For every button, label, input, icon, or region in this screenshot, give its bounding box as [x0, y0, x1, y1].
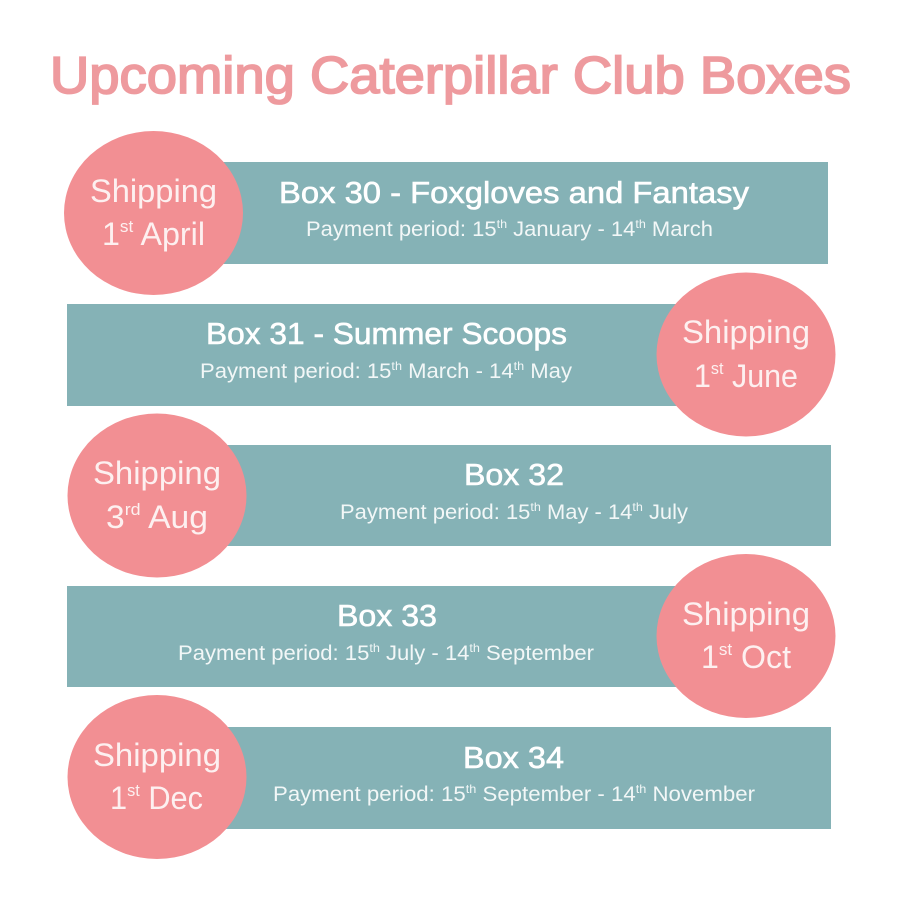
payment period: box 31: March - 14 [402, 360, 514, 383]
payment period: box 34: th [636, 782, 646, 796]
panel: box 30 [64, 131, 828, 295]
badge: shipping 1st Oct [656, 554, 836, 718]
heading: box 31: Box 31 - Summer Scoops [206, 316, 567, 351]
payment period: box 30: Payment period: 15 [306, 218, 488, 241]
payment period: box 33: th [469, 641, 480, 655]
payment period: box 33: th [369, 641, 380, 655]
banner: box 32 [205, 445, 831, 546]
shipping label: box 30: Shipping [90, 173, 217, 209]
panel: box 32 [68, 414, 831, 578]
shipping label: box 34: Shipping [93, 737, 221, 773]
shipping label: box 32: Shipping [93, 455, 221, 491]
payment period: box 30: January - 14 [507, 218, 636, 241]
badge: shipping 3rd Aug [68, 414, 246, 578]
payment period: box 31: May [524, 360, 573, 383]
badge: shipping 1st April [64, 131, 243, 295]
payment period: box 33: Payment period: 15 [178, 642, 360, 665]
shipping date: box 34: 1 [110, 780, 128, 816]
panel: box 34 [68, 695, 831, 859]
payment period: box 33: September [480, 642, 594, 665]
payment period: box 32: July [643, 501, 689, 524]
heading: box 34: Box 34 [463, 740, 564, 775]
shipping date: box 33: 1 [701, 639, 719, 675]
shipping label: box 31: Shipping [682, 314, 810, 350]
heading: box 30: Box 30 - Foxgloves and Fantasy [279, 175, 750, 210]
shipping date: box 30: 1 [102, 216, 120, 252]
heading: box 32: Box 32 [464, 457, 564, 492]
shipping date: box 31: st [711, 359, 724, 378]
shipping date: box 30: April [133, 216, 205, 252]
payment period: box 34: November [646, 783, 755, 806]
shipping date: box 32: Aug [141, 499, 208, 535]
panel: box 31 [67, 272, 836, 436]
shipping date: box 34: Dec [140, 780, 203, 816]
payment period: box 33: July - 14 [380, 642, 470, 665]
banner: box 31 [67, 304, 687, 406]
badge: shipping 1st Dec [68, 695, 246, 859]
panel: box 33 [67, 554, 836, 718]
payment period: box 30: th [497, 217, 507, 231]
payment period: box 30: th [635, 217, 646, 231]
shipping date: box 33: st [719, 640, 732, 659]
shipping date: box 31: June [724, 358, 798, 394]
heading: box 33: Box 33 [337, 598, 437, 633]
banner: box 30 [200, 162, 828, 264]
badge: shipping 1st June [656, 272, 836, 436]
shipping date: box 33: Oct [732, 639, 791, 675]
shipping label: box 33: Shipping [682, 596, 810, 632]
shipping date: box 32: 3 [106, 499, 124, 535]
payment period: box 30: March [646, 218, 713, 241]
payment period: box 32: Payment period: 15 [340, 501, 522, 524]
shipping date: box 30: st [120, 217, 134, 236]
shipping date: box 31: 1 [694, 358, 712, 394]
payment period: box 34: Payment period: 15 [273, 783, 455, 806]
banner: box 33 [67, 586, 687, 687]
banner: box 34 [205, 727, 831, 829]
payment period: box 34: September - 14 [476, 783, 636, 806]
payment period: box 32: May - 14 [541, 501, 633, 524]
payment period: box 34: th [466, 782, 476, 796]
payment period: box 31: th [514, 359, 524, 373]
title: Upcoming Caterpillar Club Boxes [50, 47, 851, 105]
shipping date: box 32: rd [125, 500, 141, 519]
payment period: box 31: th [391, 359, 402, 373]
payment period: box 31: Payment period: 15 [200, 360, 382, 383]
payment period: box 32: th [632, 500, 643, 514]
shipping date: box 34: st [127, 781, 140, 800]
payment period: box 32: th [530, 500, 541, 514]
